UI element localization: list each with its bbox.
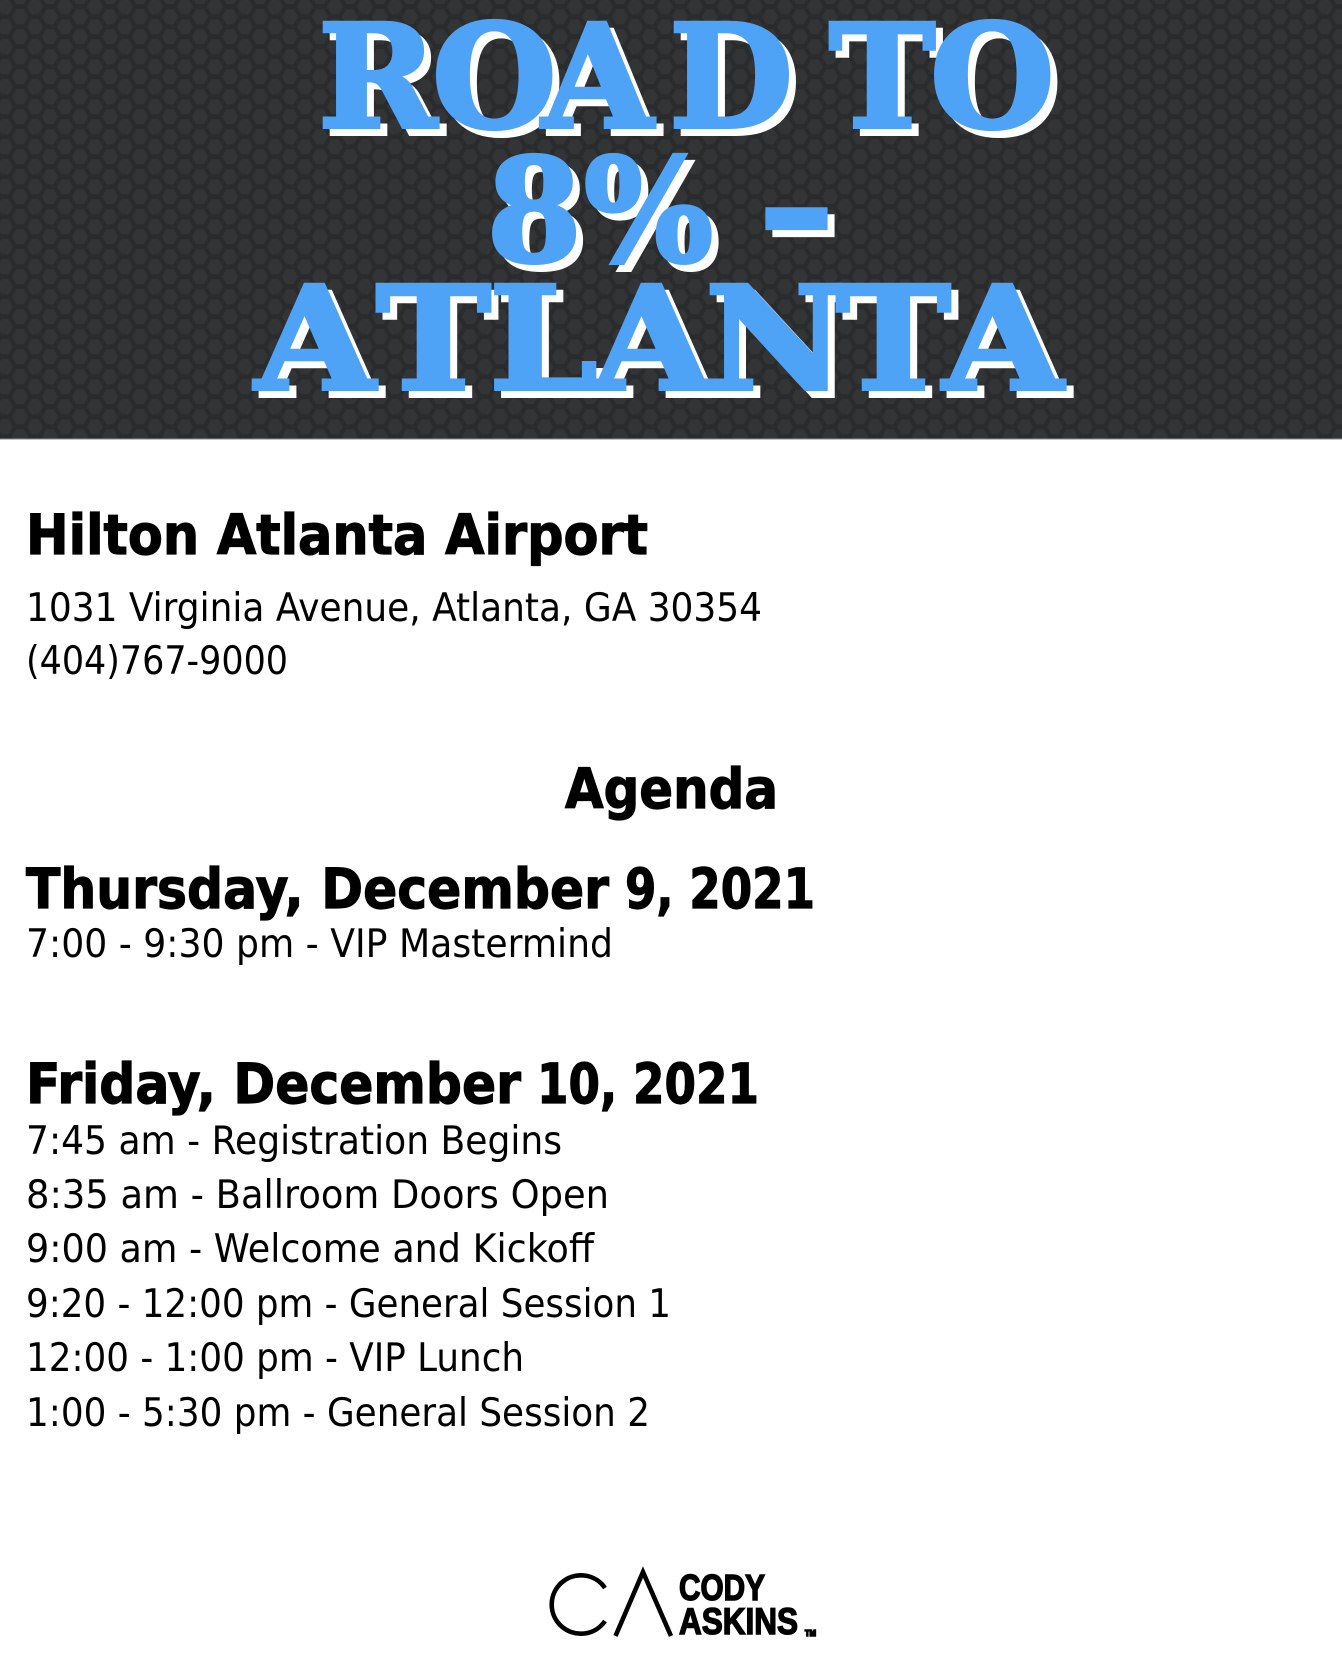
text block: Friday sessions: 9:20 - 12:00 pm - General Session 1	[26, 1282, 671, 1327]
heading: agenda: Agenda	[565, 757, 778, 821]
heading: venue name: Hilton Atlanta Airport	[26, 503, 648, 567]
title: Road to 8% - Atlanta	[253, 0, 1065, 424]
text block: Friday sessions	[26, 1119, 671, 1436]
heading: Friday date: Friday, December	[26, 1052, 521, 1116]
logo: Cody Askins: ASKINS	[679, 1601, 798, 1642]
text: Thursday session: 7:00 - 9:30 pm - VIP Mastermind	[26, 922, 613, 967]
title: Road to 8% - Atlanta: 8%	[487, 127, 713, 295]
title: Road to 8% - Atlanta: ATLANTA	[253, 255, 1065, 424]
heading: Thursday date: Thursday, December	[26, 857, 609, 921]
logo: Cody Askins: TM	[805, 1629, 816, 1638]
text block: venue address and phone	[26, 586, 762, 684]
text block: Friday sessions: 8:35 am - Ballroom Doors Open	[26, 1173, 609, 1218]
heading: Friday date: 10, 2021	[537, 1052, 759, 1116]
title: Road to 8% - Atlanta: -	[758, 123, 835, 291]
text block: Friday sessions: 12:00 - 1:00 pm - VIP Lunch	[26, 1336, 524, 1381]
text block: Friday sessions: 7:45 am - Registration Begins	[26, 1119, 562, 1164]
logo: Cody Askins: CODY	[679, 1567, 765, 1608]
icon: CA monogram	[552, 1572, 671, 1636]
panel: Friday schedule	[26, 1052, 759, 1436]
panel: dark header banner	[0, 0, 1342, 440]
heading: Thursday date: 9, 2021	[625, 857, 815, 921]
text block: venue address and phone: 1031 Virginia Avenue, Atlanta, GA 30354	[26, 586, 762, 631]
text block: Friday sessions: 9:00 am - Welcome and Kickoff	[26, 1227, 595, 1272]
panel: Thursday schedule	[26, 857, 815, 967]
logo: Cody Askins	[552, 1567, 816, 1642]
text block: Friday sessions: 1:00 - 5:30 pm - General Session 2	[26, 1391, 650, 1436]
text block: venue address and phone: (404)767-9000	[26, 639, 288, 684]
